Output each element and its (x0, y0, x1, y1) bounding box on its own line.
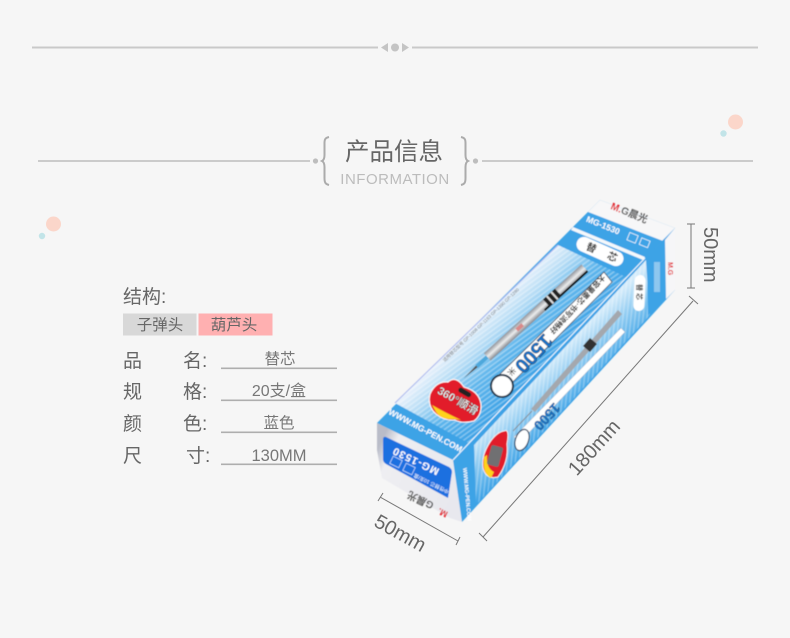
dimension: length 180mm (479, 296, 698, 541)
spec row: colour: 颜 (123, 413, 142, 435)
spec row: name: 品 (123, 351, 142, 372)
spec row: colour: 色: (183, 413, 207, 435)
sticker: 360 smooth: 360°顺滑 (435, 383, 481, 418)
spec row: size: 寸: (186, 445, 210, 467)
model band (573, 212, 662, 257)
structure label: 结构: (123, 286, 166, 308)
dimension: height 50mm: 50mm (699, 227, 721, 283)
section heading: product information: INFORMATION (340, 171, 450, 188)
box side face: M.G (666, 262, 673, 276)
dimension: length 180mm: 180mm (564, 416, 625, 480)
box side face: 1500 (531, 400, 564, 434)
box main face: MG-1530 (585, 214, 622, 237)
box side face (453, 228, 675, 522)
box main face (377, 199, 675, 460)
dimension: width 50mm: 50mm (370, 511, 430, 557)
tag: gourd tip (198, 314, 272, 336)
stripes area (395, 245, 628, 445)
feature banner 1500 metres: 米 (505, 365, 518, 378)
decorative dots left (39, 216, 61, 239)
logo band (588, 200, 675, 241)
spec row: colour (123, 413, 337, 435)
section heading: product information (38, 137, 753, 188)
spec row: name: 名: (183, 350, 207, 372)
box end face: MG-1530 (390, 444, 441, 477)
spec row: pack size: 规 (123, 381, 142, 403)
spec row: colour: 蓝色 (263, 414, 295, 432)
box end face: 中性替芯 10支/盒 (413, 472, 450, 495)
fine print along edge: 适用替芯型号 GP-1008 GP-1163 GP-1390 GP-1280 (441, 286, 521, 363)
spec row: pack size: 格: (183, 381, 207, 403)
sticker: 360 smooth (429, 379, 481, 422)
feature banner 1500 metres (491, 272, 612, 397)
box main face: M.G晨光 (609, 199, 650, 226)
side sticker (483, 431, 508, 478)
tag: bullet tip (123, 314, 196, 336)
product box: MG-1530 refill pack (377, 199, 675, 522)
dimension: width 50mm (370, 493, 460, 557)
feature banner 1500 metres: 1500 (510, 329, 557, 377)
pill: refill label: 芯 (605, 249, 620, 265)
top divider with ornament (32, 43, 758, 52)
spec row: pack size (123, 381, 337, 403)
refill drawing (460, 264, 588, 382)
spec row: size: 尺 (123, 446, 142, 467)
dimension: height 50mm (687, 224, 721, 288)
spec row: pack size: 20支/盒 (252, 382, 306, 400)
side refill drawing (531, 310, 622, 412)
decorative dots right (720, 114, 743, 137)
spec row: name (123, 350, 337, 372)
feature banner 1500 metres: 大容量墨芯·书写流畅好 (547, 273, 608, 337)
website strip: WWW.MG-PEN.COM (387, 407, 464, 454)
left edge line (395, 245, 558, 403)
tag: bullet tip: 子弹头 (137, 316, 183, 334)
section heading: product information: 产品信息 (345, 138, 443, 166)
side feature banner (514, 328, 625, 442)
box end face: G晨光 (405, 488, 436, 512)
spec row: size: 130MM (251, 447, 307, 465)
spec row: size (123, 445, 337, 467)
box side face: 替 芯 (635, 284, 644, 300)
tag: gourd tip: 葫芦头 (211, 316, 257, 334)
spec row: name: 替芯 (264, 350, 296, 368)
box end face: M. (436, 506, 449, 519)
pill: refill label: 替 (584, 240, 599, 256)
box end face (377, 423, 462, 522)
pill: refill label (574, 234, 626, 269)
box side face: WWW.MG-PEN.COM (461, 468, 472, 522)
